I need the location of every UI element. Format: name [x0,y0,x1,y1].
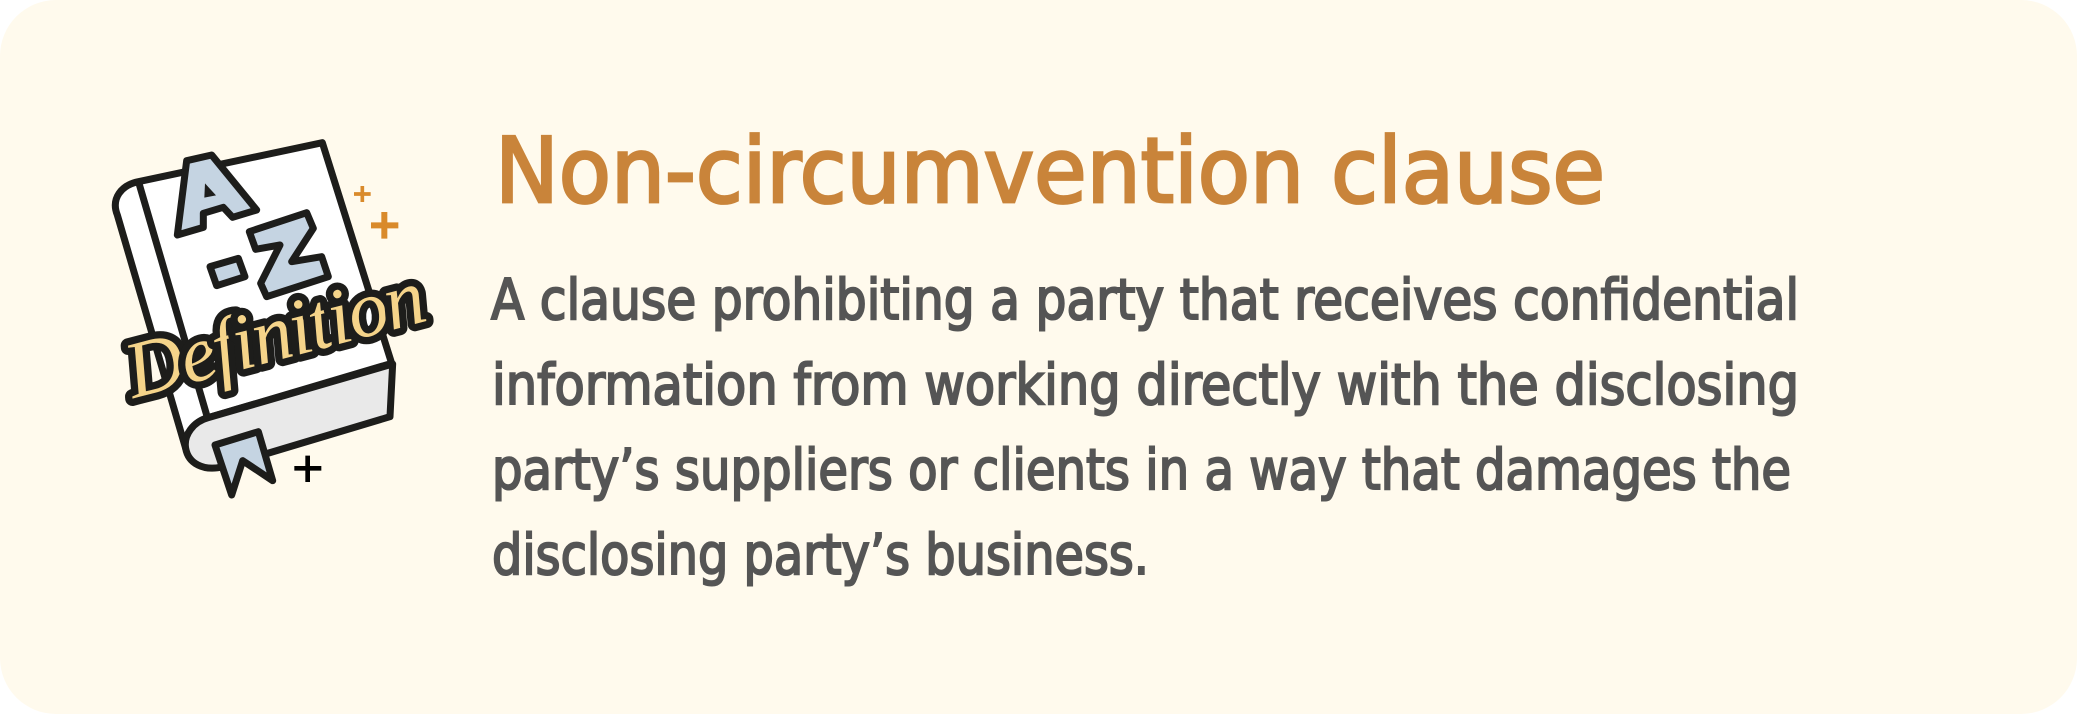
body line 2: information from working directly with the disclosing [492,353,1799,418]
sparkle: black plus [294,456,321,482]
script label: Definition: Definition [114,252,434,416]
book cover [115,143,392,448]
bookmark ribbon [215,432,273,495]
sparkle: small orange plus [354,186,371,202]
sparkle: large orange plus [371,212,398,239]
body text [491,268,1799,588]
icon: definition book [114,143,434,495]
body line 4: disclosing party’s business. [492,523,1149,588]
body line 1: A clause prohibiting a party that receives confidential [491,268,1799,333]
book spine line [139,183,207,415]
heading: Non-circumvention clause [495,119,1605,224]
letter Z [249,213,328,297]
dash between letters [210,258,245,286]
body line 3: party’s suppliers or clients in a way that damages the [492,438,1791,503]
letter A counter [204,183,216,198]
letter A [177,155,257,235]
book pages block [185,364,393,468]
